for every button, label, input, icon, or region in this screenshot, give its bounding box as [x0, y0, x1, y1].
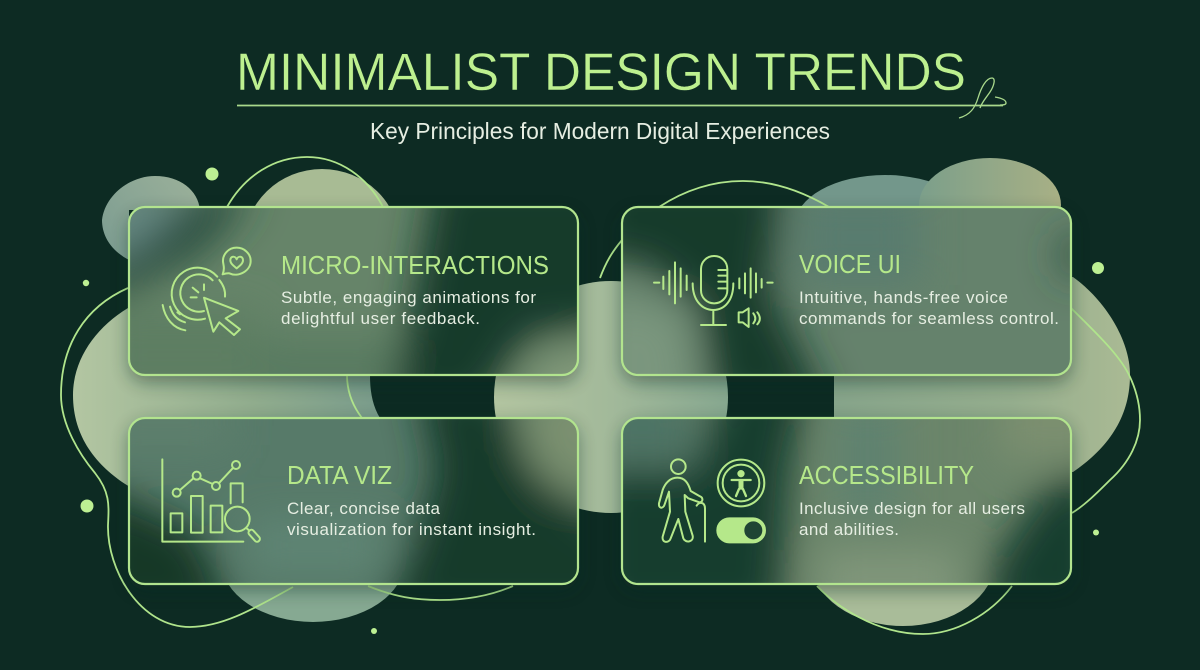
description: Clear, concise data [287, 499, 441, 518]
icon: click cursor [163, 248, 251, 335]
description: Inclusive design for all users [799, 499, 1025, 518]
thin outline curves [61, 157, 1140, 634]
icon: microphone [654, 256, 773, 327]
description: Subtle, engaging animations for [281, 288, 536, 307]
heading: VOICE UI [799, 249, 901, 279]
infographic [60, 53, 1141, 635]
background blobs [73, 158, 1130, 626]
heading: MICRO-INTERACTIONS [281, 250, 549, 280]
title: MINIMALIST DESIGN TRENDS [236, 43, 966, 102]
icon: chart with magnifier [162, 459, 261, 543]
panel: voice ui [620, 206, 1072, 376]
panel: data viz [128, 416, 580, 586]
description: Intuitive, hands-free voice [799, 288, 1008, 307]
description: visualization for instant insight. [287, 520, 536, 539]
title underline with flourish [237, 78, 1006, 118]
description: commands for seamless control. [799, 309, 1059, 328]
icon: accessibility person and toggle [659, 459, 765, 542]
heading: ACCESSIBILITY [799, 460, 974, 490]
description: and abilities. [799, 520, 899, 539]
subtitle: Key Principles for Modern Digital Experiences [370, 118, 830, 144]
panel: accessibility [620, 416, 1072, 586]
card shadows [129, 214, 1071, 590]
heading: DATA VIZ [287, 460, 392, 490]
panel: micro-interactions [128, 206, 580, 376]
decorative dots [80, 168, 1104, 634]
description: delightful user feedback. [281, 309, 480, 328]
